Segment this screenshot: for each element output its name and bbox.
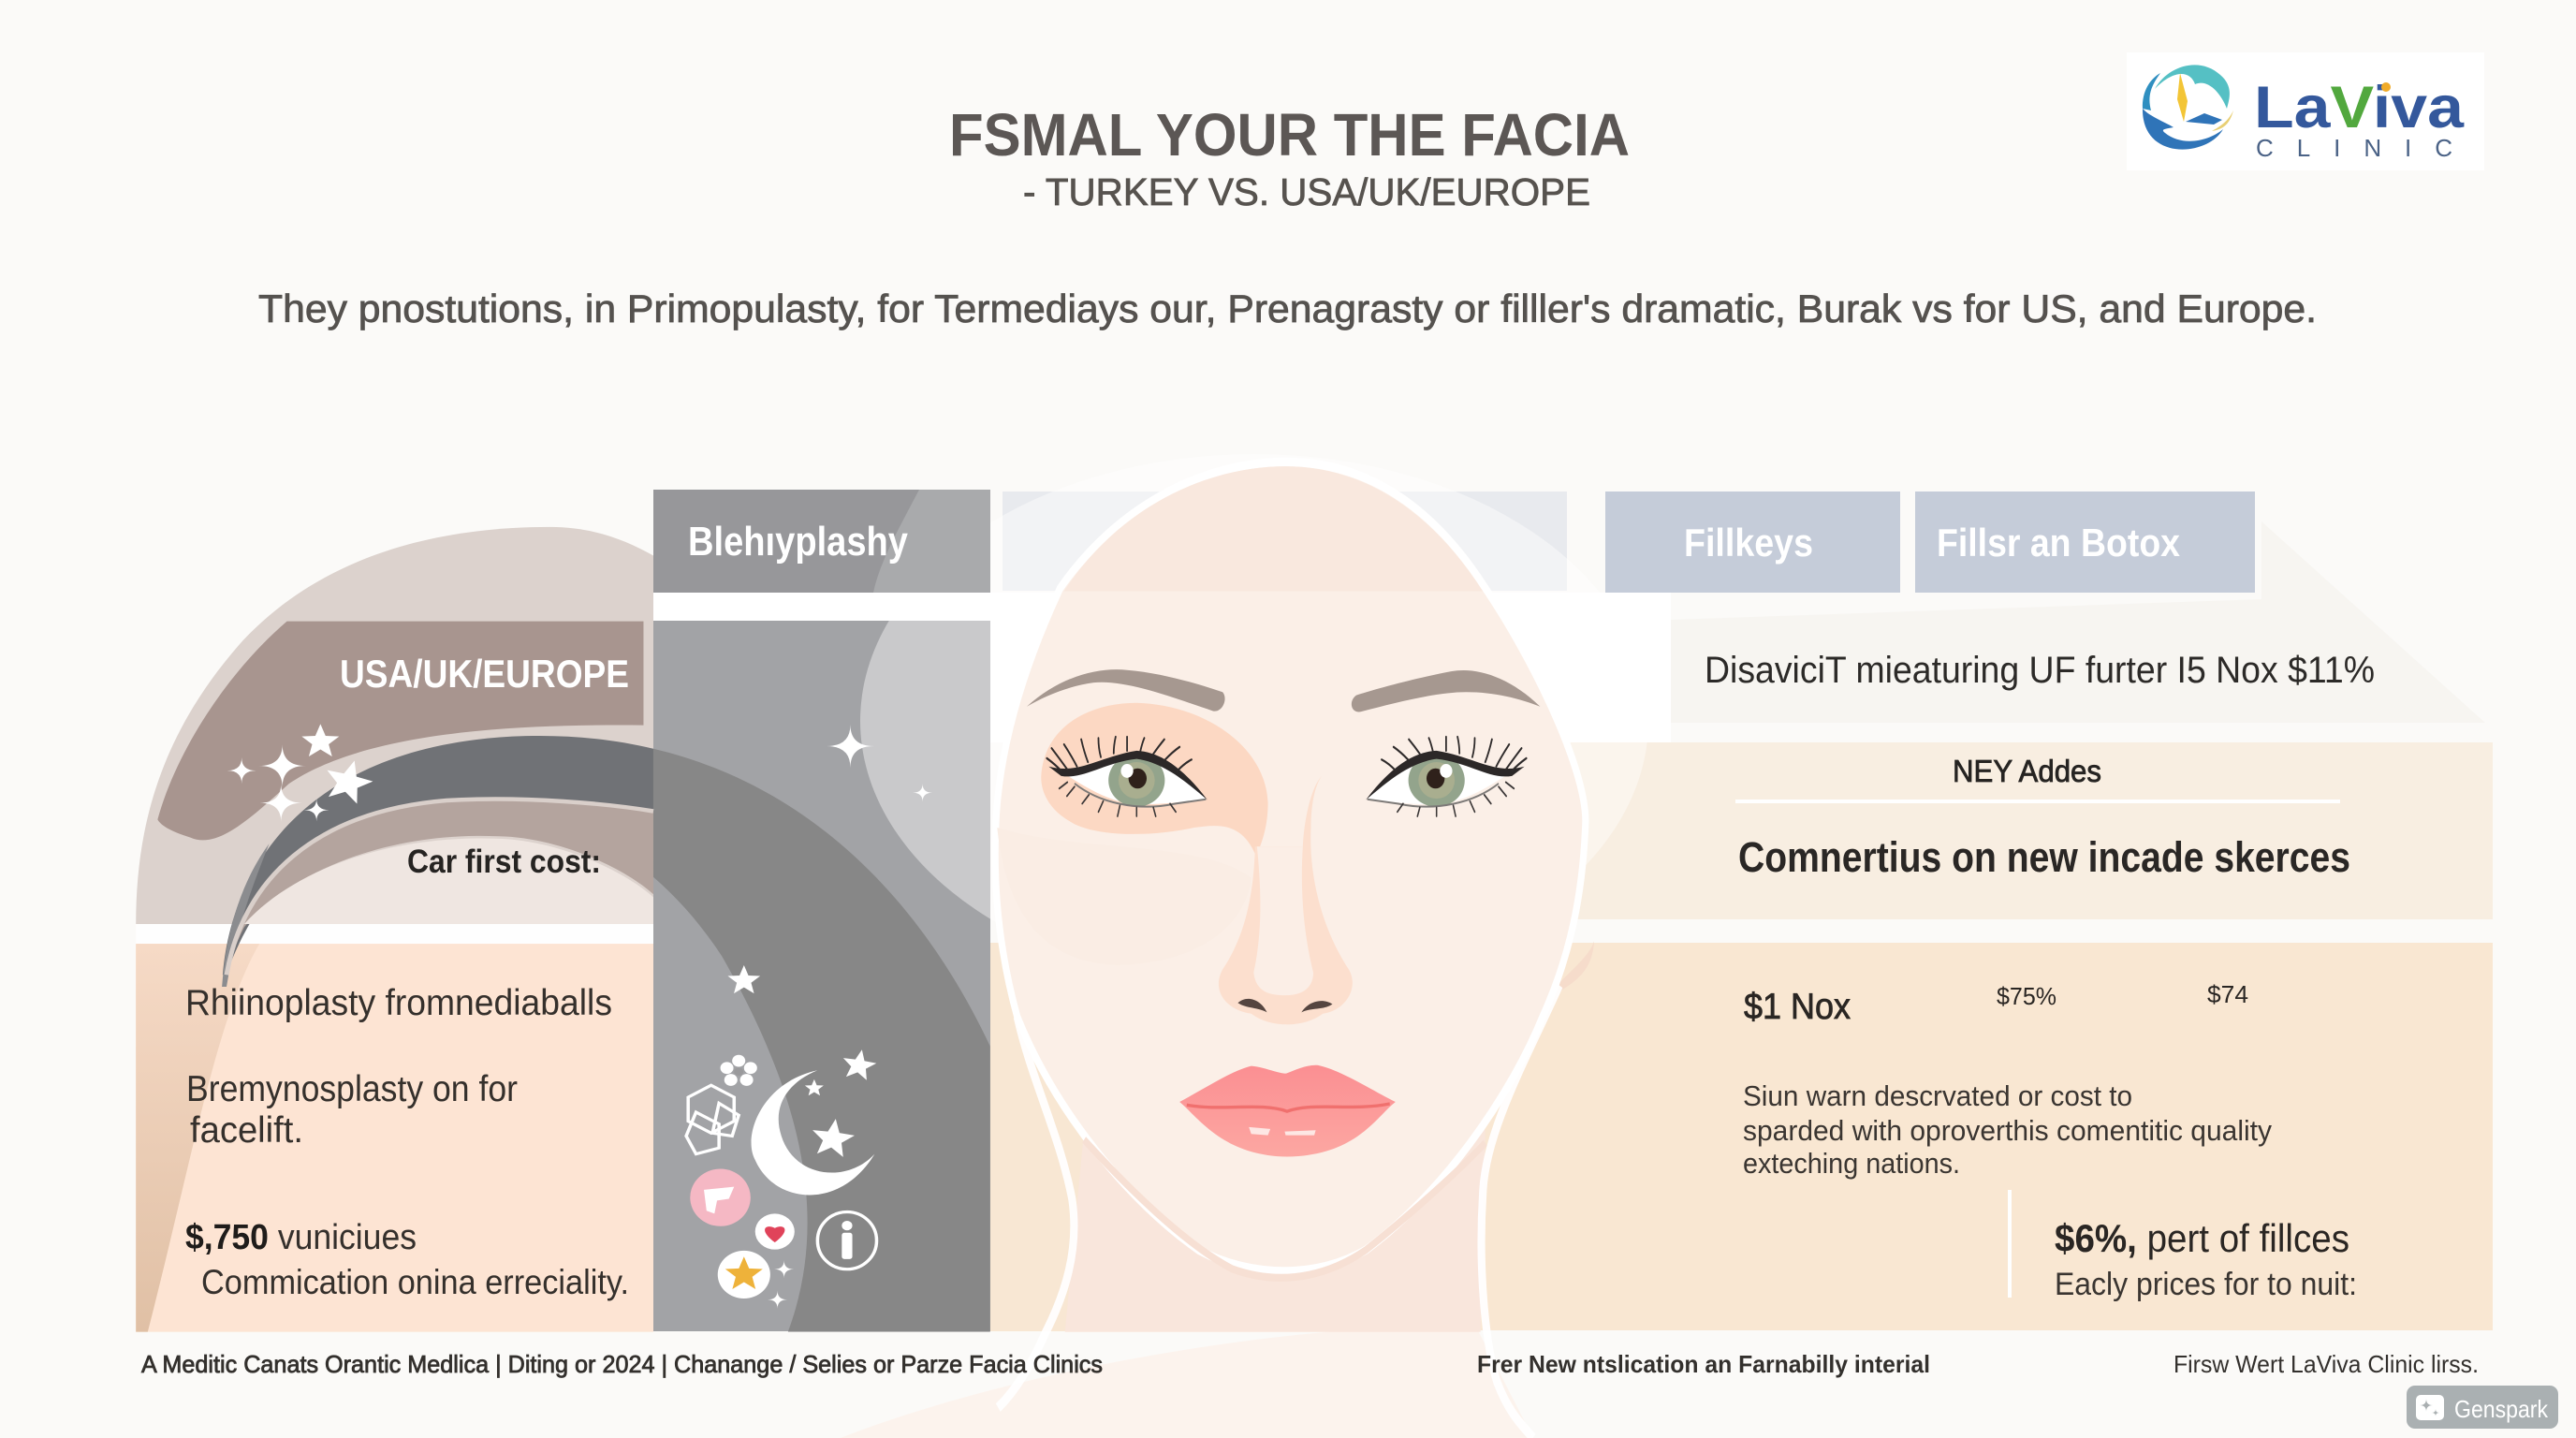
nose bridge	[1253, 846, 1313, 995]
footer: Frer New ntslication an Farnabilly interial	[1477, 1350, 1930, 1378]
label: USA/UK/EUROPE: USA/UK/EUROPE	[340, 652, 629, 696]
text block: lower right figures: exteching nations.	[1743, 1147, 1960, 1180]
stripe highlight	[227, 800, 653, 975]
panel: lower center band	[990, 943, 1178, 1331]
text block: lower right figures: Eacly prices for to nuit:	[2055, 1267, 2357, 1302]
white gap around head	[990, 593, 1671, 742]
arch shape	[136, 527, 653, 924]
label: car first cost: Car first cost:	[407, 844, 601, 880]
left cheek	[997, 828, 1251, 965]
head	[995, 462, 1586, 1271]
Rhinoplasty line: Rhiinoplasty fromnediaballs	[185, 983, 612, 1023]
face illustration	[841, 462, 1594, 1438]
price line: $,750 vuniciues	[185, 1218, 417, 1257]
text block: lower right figures: sparded with oproverthis comentitic quality	[1743, 1114, 2272, 1147]
title: FSMAL YOUR THE FACIA	[949, 101, 1630, 169]
logo: LaViva Clinic: CLINIC	[2256, 134, 2452, 162]
text block: lower right figures: $75%	[1997, 982, 2056, 1010]
header: Fillkeys: Fillkeys	[1684, 521, 1813, 565]
shoulder	[841, 1330, 1533, 1438]
description: Siun warn descrvated or cost to	[1743, 1079, 2132, 1112]
text block: lower right figures	[1743, 980, 2357, 1302]
soft background shape right	[1671, 521, 2485, 723]
header: Blepharoplasty	[653, 490, 990, 593]
brow left	[1027, 669, 1225, 712]
panel: USA arch and left column	[136, 527, 653, 1332]
forehead tint	[1064, 466, 1483, 592]
badge: Genspark	[2407, 1386, 2558, 1429]
white gap strip	[136, 924, 653, 944]
tan curve	[136, 944, 259, 1332]
Bremynosplasty lines: Bremynosplasty on for	[186, 1069, 518, 1109]
stars near arch	[227, 724, 377, 822]
header: blank column	[1003, 492, 1567, 591]
text block: lower right figures: $6%, pert of fillces	[2055, 1216, 2349, 1260]
lower taupe stripe	[227, 800, 653, 975]
eye right	[1366, 737, 1527, 816]
eye left	[1046, 737, 1208, 816]
footer: A Meditic Canats Orantic Medlica | Diting or 2024 | Chanange / Selies or Parze Facia Clinics	[141, 1350, 1103, 1378]
USA band	[157, 622, 643, 840]
panel: NEY band	[1535, 742, 2493, 919]
header: Fillkeys	[1605, 492, 1900, 593]
moon cluster	[686, 1047, 879, 1309]
nostril right	[1301, 1001, 1332, 1012]
panel: lower right band	[1480, 943, 2493, 1330]
eye patch	[1041, 703, 1268, 856]
nostril left	[1237, 999, 1267, 1012]
head halo	[860, 454, 1648, 988]
header: Fillers and Botox: Fillsr an Botox	[1937, 521, 2181, 565]
panel: Disavicit row text: DisaviciT mieaturing UF furter I5 Nox $11%	[1705, 650, 2375, 691]
header: Blepharoplasty: Blehıyplashy	[688, 519, 908, 565]
brow right	[1352, 670, 1540, 712]
peach panel	[136, 944, 653, 1332]
intro text: They pnostutions, in Primopulasty, for Termediays our, Prenagrasty or filller's dramatic, Burak vs for US, and Europe.	[258, 286, 2317, 330]
logo: LaViva Clinic	[2127, 52, 2484, 170]
tail highlight	[222, 844, 270, 987]
text block: NEY Addes: NEY Addes	[1953, 754, 2101, 788]
logo: LaViva Clinic: LaViva	[2254, 75, 2465, 140]
icons: sparkles and moon	[227, 724, 932, 1309]
subtitle: - TURKEY VS. USA/UK/EUROPE	[1023, 170, 1590, 213]
pale arch interior	[244, 838, 653, 924]
text block: left procedures: facelift.	[190, 1110, 303, 1151]
ear	[1557, 941, 1594, 991]
header: Fillers and Botox	[1915, 492, 2255, 593]
price row: $1 Nox	[1744, 987, 1851, 1027]
note line: Commication onina erreciality.	[201, 1263, 629, 1301]
jaw shadow	[1084, 1139, 1486, 1278]
lips	[1179, 1065, 1396, 1157]
text block: lower right figures: $74	[2207, 980, 2248, 1008]
neck	[1065, 1130, 1486, 1332]
sparkles in column	[727, 725, 932, 993]
hair outline	[998, 985, 1559, 1438]
text block: NEY Addes: Comnertius on new incade skerces	[1738, 833, 2350, 881]
text block: left procedures	[185, 983, 629, 1301]
nose	[1219, 776, 1353, 1024]
panel: Blepharoplasty column body	[653, 593, 990, 1331]
curved band	[222, 736, 990, 1332]
footer: Firsw Wert LaViva Clinic lirss.	[2174, 1350, 2479, 1378]
text block: NEY Addes	[1735, 754, 2350, 881]
footer	[141, 1350, 2479, 1378]
badge: Genspark: Genspark	[2454, 1395, 2549, 1423]
divider and stat	[2008, 1190, 2012, 1298]
